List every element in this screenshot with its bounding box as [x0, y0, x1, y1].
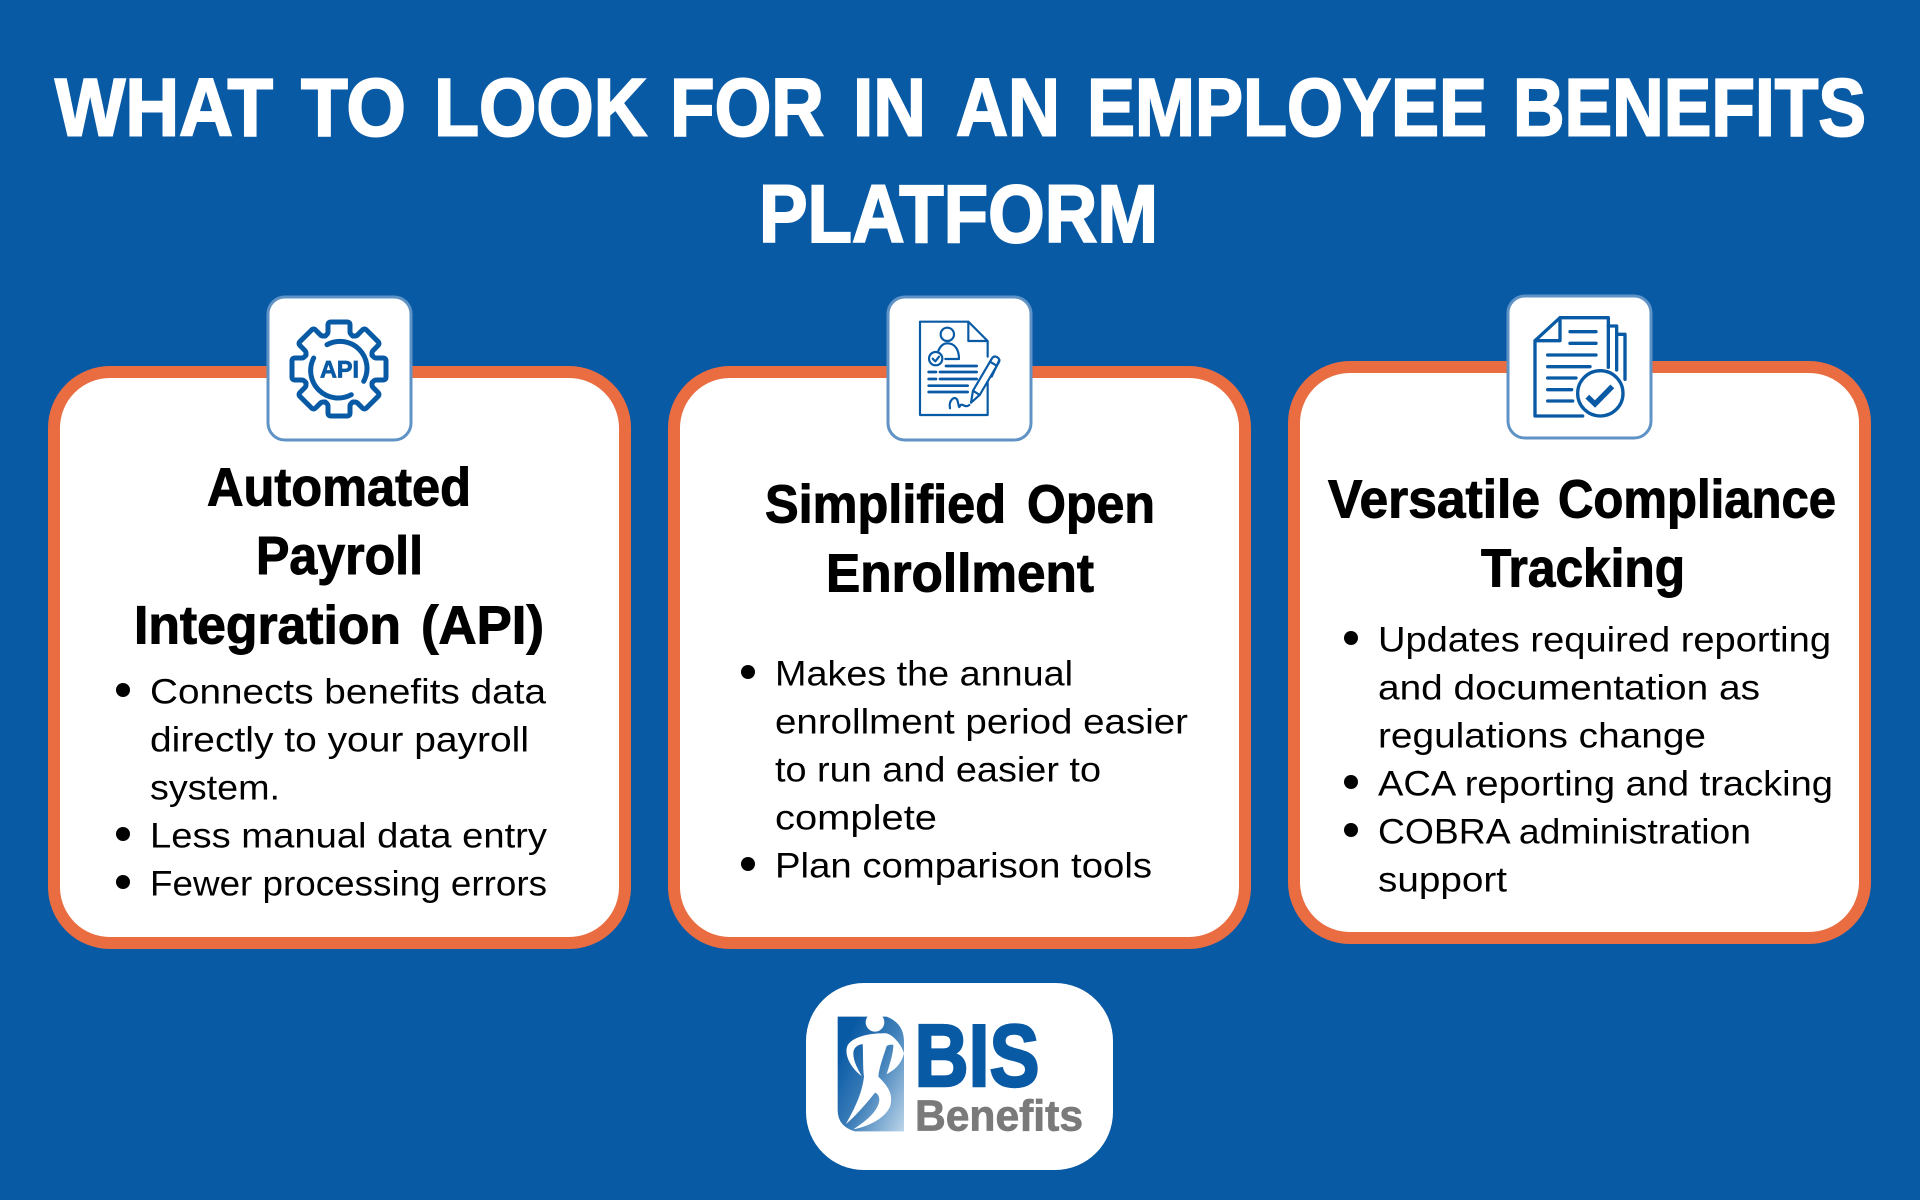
logo wordmark — [914, 1006, 1083, 1140]
panel: automated payroll integration — [54, 297, 625, 943]
bullet list: and documentation as — [1378, 668, 1760, 708]
logo: BIS Benefits — [806, 983, 1113, 1170]
title: EMPLOYEE — [1087, 62, 1487, 154]
title: FOR — [670, 62, 824, 154]
bullet list: Updates required reporting — [1378, 620, 1831, 660]
bullet list: enrollment period easier — [775, 702, 1188, 742]
icon: runner shield — [838, 1013, 904, 1131]
card frame — [674, 372, 1245, 943]
heading: Integration — [134, 596, 401, 656]
panel: versatile compliance tracking — [1294, 296, 1865, 938]
heading: (API) — [421, 596, 544, 656]
bullet list: Less manual data entry — [150, 816, 547, 856]
bullet list: regulations change — [1378, 716, 1706, 756]
panel: simplified open enrollment — [674, 297, 1245, 943]
bullet list: Connects benefits data — [150, 672, 546, 712]
bullet list: ACA reporting and tracking — [1378, 764, 1833, 804]
title: PLATFORM — [759, 169, 1158, 260]
title: AN — [956, 62, 1060, 154]
heading: Enrollment — [826, 544, 1094, 604]
logo wordmark: Benefits — [915, 1092, 1083, 1140]
title: WHAT — [55, 62, 273, 154]
card frame — [1294, 367, 1865, 938]
heading: Versatile — [1328, 470, 1540, 530]
heading: Automated — [207, 458, 471, 518]
bullet list — [1344, 620, 1833, 900]
bullet list: Plan comparison tools — [775, 846, 1152, 886]
title: BENEFITS — [1513, 62, 1866, 154]
bullet list — [116, 672, 547, 904]
bullet list: COBRA administration — [1378, 812, 1751, 852]
heading: Simplified — [765, 474, 1006, 534]
bullet list: directly to your payroll — [150, 720, 529, 760]
heading: Payroll — [256, 526, 423, 586]
heading — [134, 458, 544, 656]
icon box: signed document — [888, 297, 1031, 440]
bullet list: support — [1378, 860, 1507, 900]
bullet list: complete — [775, 798, 937, 838]
bullet list: system. — [150, 768, 280, 808]
title — [55, 62, 1866, 260]
icon box: checked documents — [1508, 296, 1651, 438]
bullet list: Makes the annual — [775, 654, 1073, 694]
heading — [1328, 470, 1836, 598]
title: LOOK — [434, 62, 647, 154]
icon box: API gear: API — [320, 356, 359, 384]
bullet list: to run and easier to — [775, 750, 1101, 790]
heading: Open — [1027, 474, 1155, 534]
bullet list: Fewer processing errors — [150, 864, 547, 904]
title: IN — [853, 62, 926, 154]
logo wordmark: BIS — [914, 1006, 1040, 1105]
heading: Compliance — [1558, 470, 1836, 530]
bullet list — [741, 654, 1188, 886]
title: TO — [301, 62, 406, 154]
heading — [765, 474, 1155, 604]
heading: Tracking — [1481, 538, 1685, 598]
icon box: API gear — [268, 297, 411, 440]
card frame — [54, 372, 625, 943]
